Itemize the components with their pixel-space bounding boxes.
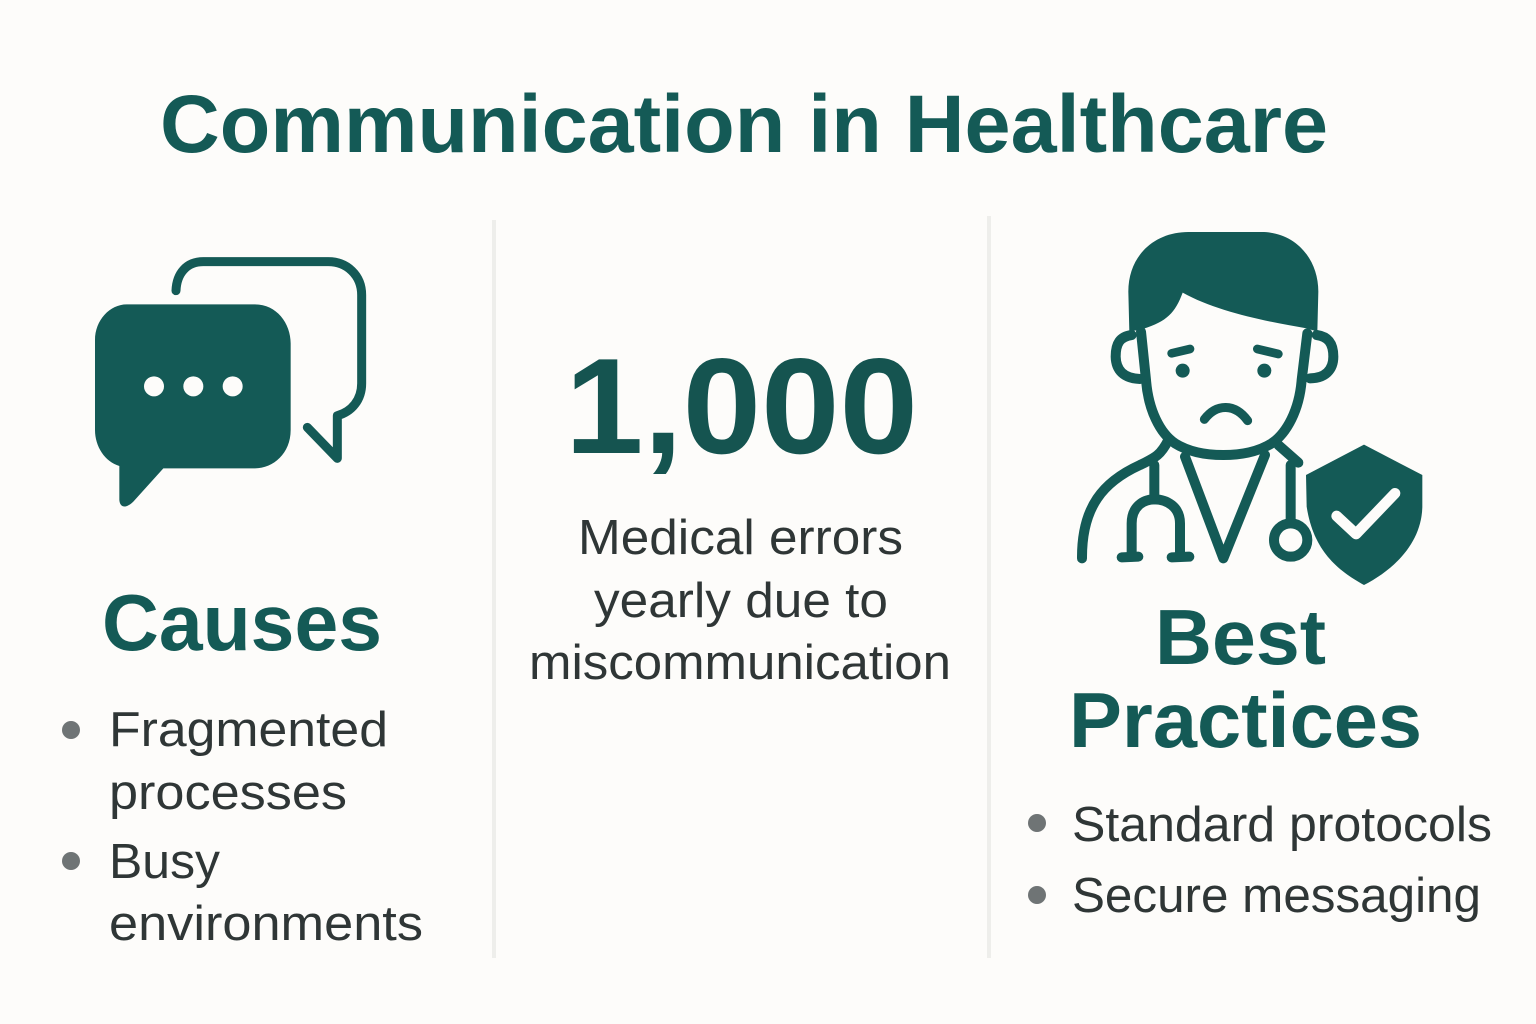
heading: best practices bbox=[1069, 593, 1422, 764]
heading: best practices: Best bbox=[1155, 593, 1326, 681]
bullet list: best practices: Secure messaging bbox=[1072, 869, 1481, 923]
bullet list: causes: Fragmented bbox=[109, 703, 388, 757]
panel: causes bbox=[62, 262, 423, 951]
statistic caption: yearly due to bbox=[594, 574, 888, 628]
bullet list: causes: Busy bbox=[109, 835, 221, 889]
big number: 1,000 bbox=[565, 330, 918, 482]
heading: best practices: Practices bbox=[1069, 676, 1422, 764]
icon: speech bubbles bbox=[95, 262, 362, 506]
statistic caption bbox=[529, 511, 951, 690]
icon: shield with check bbox=[1306, 445, 1422, 585]
panel: best practices bbox=[1028, 232, 1492, 923]
heading: causes: Causes bbox=[102, 578, 382, 667]
bullet list: causes: environments bbox=[109, 897, 423, 951]
bullet list: best practices bbox=[1028, 798, 1492, 923]
icon: doctor with stethoscope bbox=[1082, 232, 1333, 558]
bullet list: causes bbox=[62, 703, 423, 951]
bullet list: best practices: Standard protocols bbox=[1072, 798, 1492, 852]
bullet list: causes: processes bbox=[109, 766, 347, 820]
statistic caption: miscommunication bbox=[529, 636, 951, 690]
title: Communication in Healthcare bbox=[160, 79, 1328, 170]
statistic caption: Medical errors bbox=[578, 511, 903, 565]
panel: statistic bbox=[529, 330, 951, 690]
